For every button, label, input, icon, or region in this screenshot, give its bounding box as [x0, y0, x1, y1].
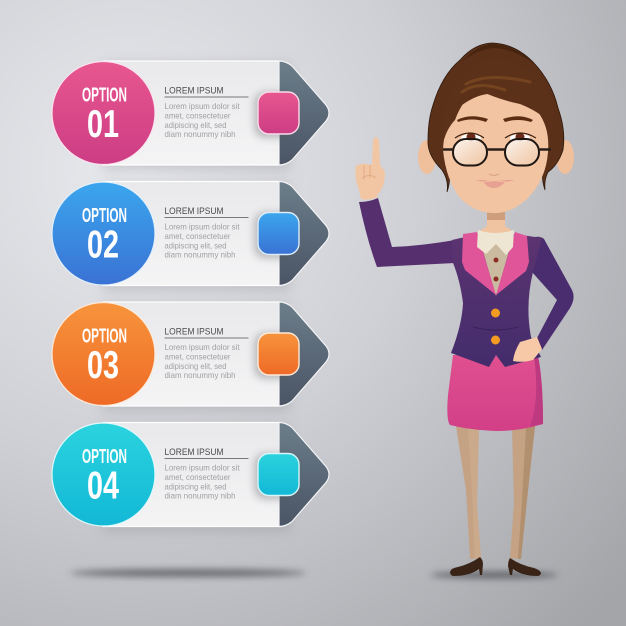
body text: amet, consectetuer — [164, 352, 231, 362]
ground shadow under panels — [70, 569, 306, 577]
body text: adipiscing elit, sed — [164, 362, 227, 371]
body text: adipiscing elit, sed — [164, 241, 227, 250]
eyebrows — [457, 116, 533, 122]
arrow tab — [279, 61, 329, 165]
hair back — [428, 43, 564, 192]
hand on hip — [513, 337, 542, 362]
body text: amet, consectetuer — [164, 232, 231, 241]
arrow tab — [279, 422, 329, 526]
arrow tab — [279, 182, 329, 286]
lapels — [462, 232, 529, 295]
mouth — [475, 180, 515, 188]
neck — [478, 205, 514, 248]
arrow tab — [279, 302, 329, 406]
raised arm — [359, 198, 455, 267]
hair top shade — [462, 44, 532, 62]
hand pointing up — [355, 137, 385, 200]
eyes — [455, 132, 536, 142]
panel: option 04 — [52, 422, 329, 532]
square marker — [258, 92, 299, 134]
heading: LOREM IPSUM — [164, 447, 224, 457]
body text: Lorem ipsum dolor sit — [164, 222, 240, 232]
square marker — [258, 454, 299, 496]
skirt side shade — [530, 356, 543, 426]
panel: option 02 — [52, 182, 329, 290]
shirt buttons — [494, 258, 498, 282]
body text: diam nonummy nibh — [164, 371, 236, 380]
body text: Lorem ipsum dolor sit — [164, 343, 240, 352]
hair highlight streak — [462, 77, 530, 92]
nose — [489, 174, 499, 176]
panel: option 01 — [52, 61, 329, 170]
card body — [103, 182, 281, 286]
shirt — [478, 240, 514, 296]
neck shadow — [487, 211, 505, 220]
number: 04 — [87, 464, 119, 508]
body text: adipiscing elit, sed — [164, 121, 227, 130]
number circle — [52, 62, 155, 164]
skirt — [447, 355, 543, 431]
number: 02 — [87, 224, 119, 266]
label option: OPTION — [82, 446, 127, 468]
square marker — [258, 212, 299, 254]
face — [443, 94, 548, 213]
jacket waist crease — [473, 327, 518, 330]
fringe — [442, 58, 554, 145]
label option: OPTION — [82, 205, 127, 227]
legs — [456, 426, 535, 559]
number: 03 — [87, 344, 119, 387]
number circle — [52, 423, 155, 526]
jacket — [451, 234, 542, 367]
heading: LOREM IPSUM — [164, 206, 224, 216]
square marker — [258, 333, 299, 375]
heading: LOREM IPSUM — [164, 326, 224, 336]
body text: Lorem ipsum dolor sit — [164, 102, 240, 111]
number circle — [52, 302, 155, 406]
label option: OPTION — [82, 84, 127, 106]
body text: diam nonummy nibh — [164, 250, 236, 260]
label option: OPTION — [82, 326, 127, 348]
ground shadow under character — [430, 572, 558, 578]
jacket buttons — [491, 308, 500, 344]
heading: LOREM IPSUM — [164, 86, 224, 96]
glasses — [443, 139, 551, 166]
number circle — [52, 182, 155, 285]
body text: amet, consectetuer — [164, 112, 231, 120]
character: businesswoman pointing up — [355, 43, 574, 576]
collar — [477, 230, 514, 255]
ears — [418, 140, 574, 174]
card body — [103, 422, 281, 526]
card body — [103, 302, 281, 406]
body text: Lorem ipsum dolor sit — [164, 464, 240, 472]
panel: option 03 — [52, 302, 329, 411]
body text: adipiscing elit, sed — [164, 482, 227, 491]
card body — [103, 61, 281, 165]
body text: amet, consectetuer — [164, 473, 231, 482]
body text: diam nonummy nibh — [164, 492, 236, 500]
shoes — [450, 557, 541, 576]
far arm — [532, 237, 574, 350]
number: 01 — [87, 103, 119, 146]
body text: diam nonummy nibh — [164, 130, 236, 139]
